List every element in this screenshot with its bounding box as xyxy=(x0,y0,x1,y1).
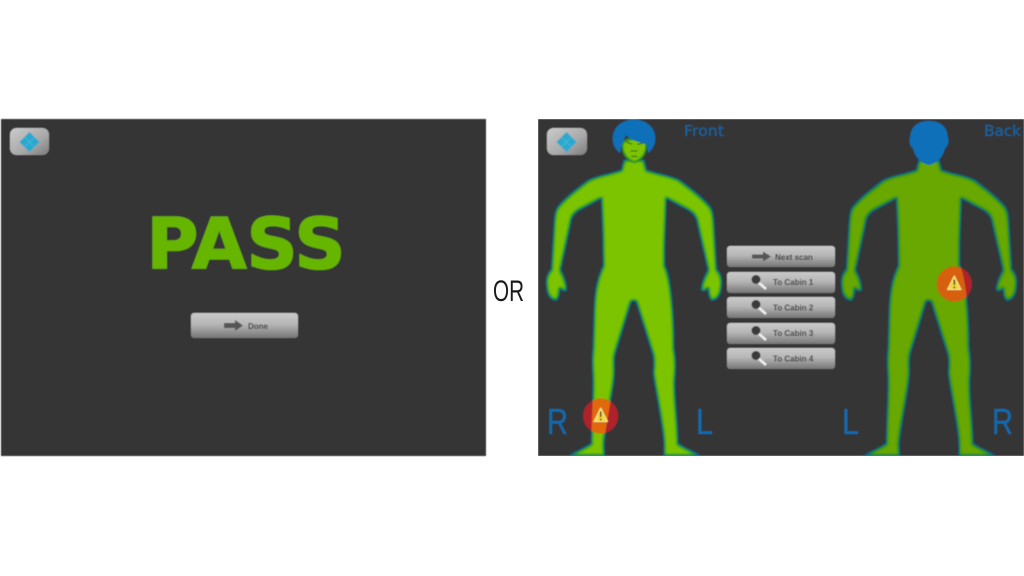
button: To Cabin 1 xyxy=(727,272,835,293)
figure: back body xyxy=(841,121,1017,456)
label: front R: R xyxy=(547,401,568,442)
warning marker: back hip xyxy=(937,266,972,302)
label: Back: Back xyxy=(984,122,1021,140)
button: To Cabin 2 xyxy=(727,297,835,318)
button: To Cabin 2: To Cabin 2 xyxy=(773,304,814,312)
button: Done: Done xyxy=(248,322,269,331)
label: OR: OR xyxy=(493,275,524,308)
home button xyxy=(10,128,49,155)
label: back R: R xyxy=(992,401,1013,442)
button: Next scan xyxy=(727,246,835,267)
figure: front body xyxy=(546,120,722,456)
panel: body scan screen xyxy=(538,119,1024,456)
button: To Cabin 4 xyxy=(727,348,835,369)
button: To Cabin 3 xyxy=(727,323,835,344)
panel: pass screen xyxy=(1,119,486,456)
label: front L: L xyxy=(696,401,713,442)
button: Done xyxy=(191,313,298,338)
label: Front: Front xyxy=(684,122,724,140)
home button xyxy=(547,128,587,155)
button: Next scan: Next scan xyxy=(775,253,813,262)
button: To Cabin 4: To Cabin 4 xyxy=(773,354,814,364)
label: back L: L xyxy=(842,401,859,442)
button: To Cabin 3: To Cabin 3 xyxy=(773,329,814,338)
warning marker: front leg xyxy=(583,398,618,434)
heading: PASS: PASS xyxy=(146,204,346,286)
button: To Cabin 1: To Cabin 1 xyxy=(773,278,814,287)
